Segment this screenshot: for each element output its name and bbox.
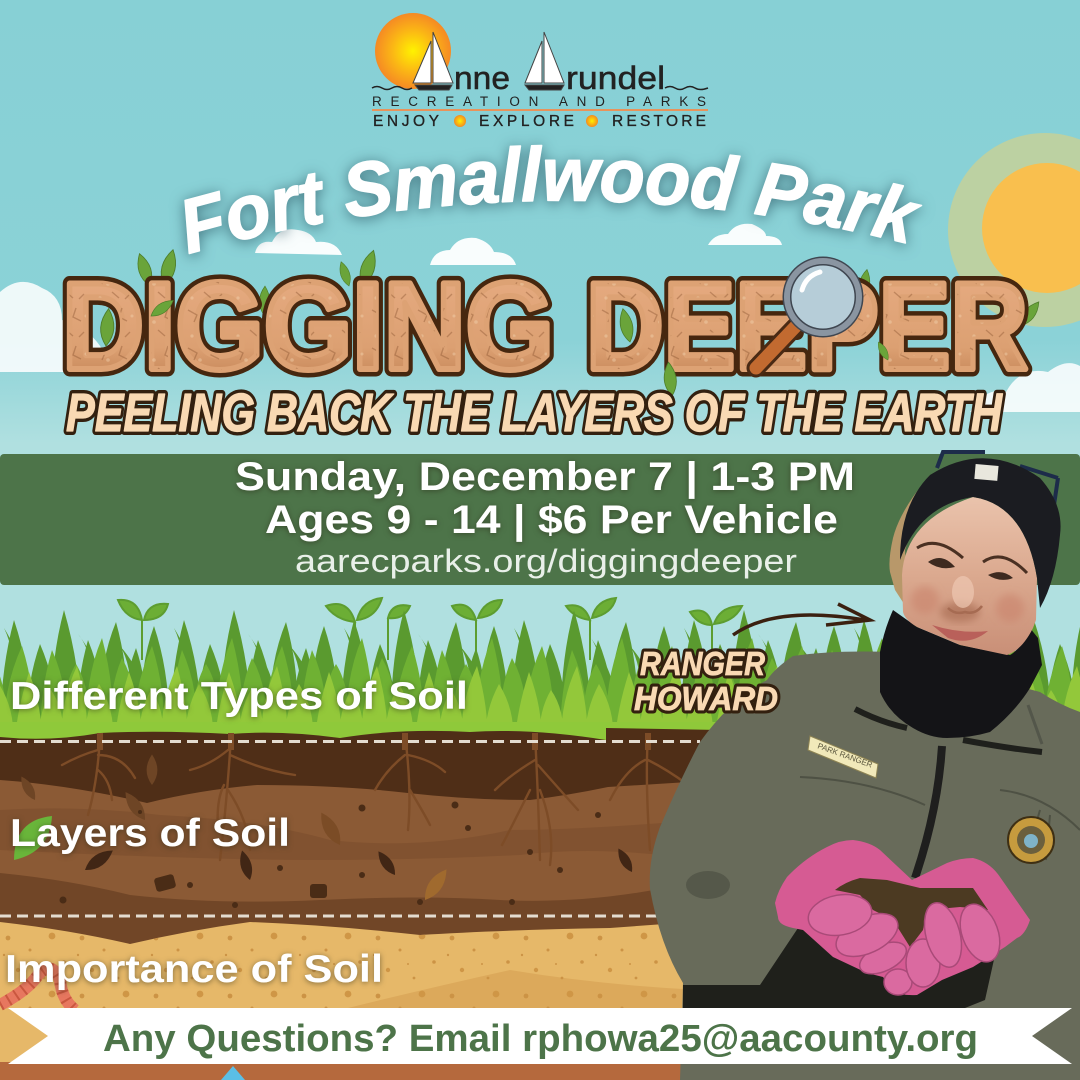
date and time: Sunday, December 7 | 1-3 PM [235,455,855,499]
glove fingers [805,890,1007,995]
logo subtitle: RECREATION AND PARKS [372,94,706,109]
caption name line 1: RANGER [640,645,765,682]
caption arrow [733,604,870,635]
label: layers of soil: Layers of Soil [10,812,290,855]
name tag [808,736,878,778]
magnifying glass [756,261,859,368]
dashed horizon lines [0,742,700,916]
sun: right side [948,133,1080,327]
green leaf [14,816,52,860]
plant roots [62,735,688,865]
deep earth strip [0,1062,1080,1080]
scarf [880,610,1042,738]
logo waves [372,86,708,90]
title word Digging: DIGGING [62,258,554,396]
beanie [900,458,1061,608]
nose [948,606,982,613]
lighter subsoil band [0,808,700,860]
sprouts [118,598,742,660]
sand layer [0,920,720,1080]
plant root trunks [100,733,648,750]
info band [0,454,1080,585]
title outline [62,258,1028,396]
soil pebbles [60,802,601,908]
logo tagline: ENJOY [373,113,439,130]
logo: Anne Arundel Recreation and Parks [372,13,708,130]
face [902,497,1037,655]
pink gloves [775,840,1030,995]
sunglasses on beanie [937,452,1058,505]
grass [0,600,1080,742]
buried leaves [17,754,636,904]
blond hair [889,475,930,610]
leaves on title [99,296,891,397]
beanie logo patch [974,464,999,481]
photo: Ranger Howard holding soil [650,452,1080,1080]
logo sailboats [413,32,564,90]
sand dots [0,920,720,1010]
soil topic labels [5,675,468,991]
jacket sleeve shading [686,871,730,899]
label: different types of soil: Different Types of Soil [10,675,468,718]
caption: Ranger Howard [634,604,870,717]
logo tagline [373,113,706,130]
jacket [650,652,1080,1080]
earthworm [0,969,75,1010]
logo sun [375,13,451,89]
logo tagline: RESTORE [612,113,706,130]
caption name line 1: RANGER [640,645,765,682]
face shading [911,586,1024,622]
caption name line 2: HOWARD [634,680,778,717]
sky background [0,0,1080,740]
zipper [915,746,942,878]
eyes and brows [917,543,1027,573]
website: aarecparks.org/diggingdeeper [295,543,797,579]
label: importance of soil: Importance of Soil [5,948,383,991]
logo name: nne [454,60,510,96]
blue tip at bottom [221,1066,245,1080]
leaves behind title [134,248,1043,329]
brown subsoil layer [0,780,720,930]
gold badge [1008,817,1054,863]
logo name right: rundel [566,60,665,96]
title texture: DIGGING [62,258,554,396]
heading: Fort Smallwood Park: Fort Smallwood Park [176,140,925,262]
name tag text: PARK RANGER [816,741,874,770]
caption name line 2: HOWARD [634,680,778,717]
lower dark band [0,873,700,960]
dark area under hands [683,925,995,1010]
title outline: DIGGING [62,258,554,396]
sand shading [340,970,700,1010]
collar [855,709,1042,752]
title texture [62,258,1028,396]
clouds [0,224,1080,412]
topsoil layer [0,728,720,900]
soil layers [0,728,1080,1080]
logo tagline: EXPLORE [479,113,574,130]
ages and price: Ages 9 - 14 | $6 Per Vehicle [265,498,838,542]
soil in hands [835,878,988,947]
contact email text: Any Questions? Email rphowa25@aacounty.org [103,1018,978,1060]
contact ribbon [8,1008,1072,1064]
smile [932,625,988,641]
title: Digging Deeper [62,248,1043,397]
